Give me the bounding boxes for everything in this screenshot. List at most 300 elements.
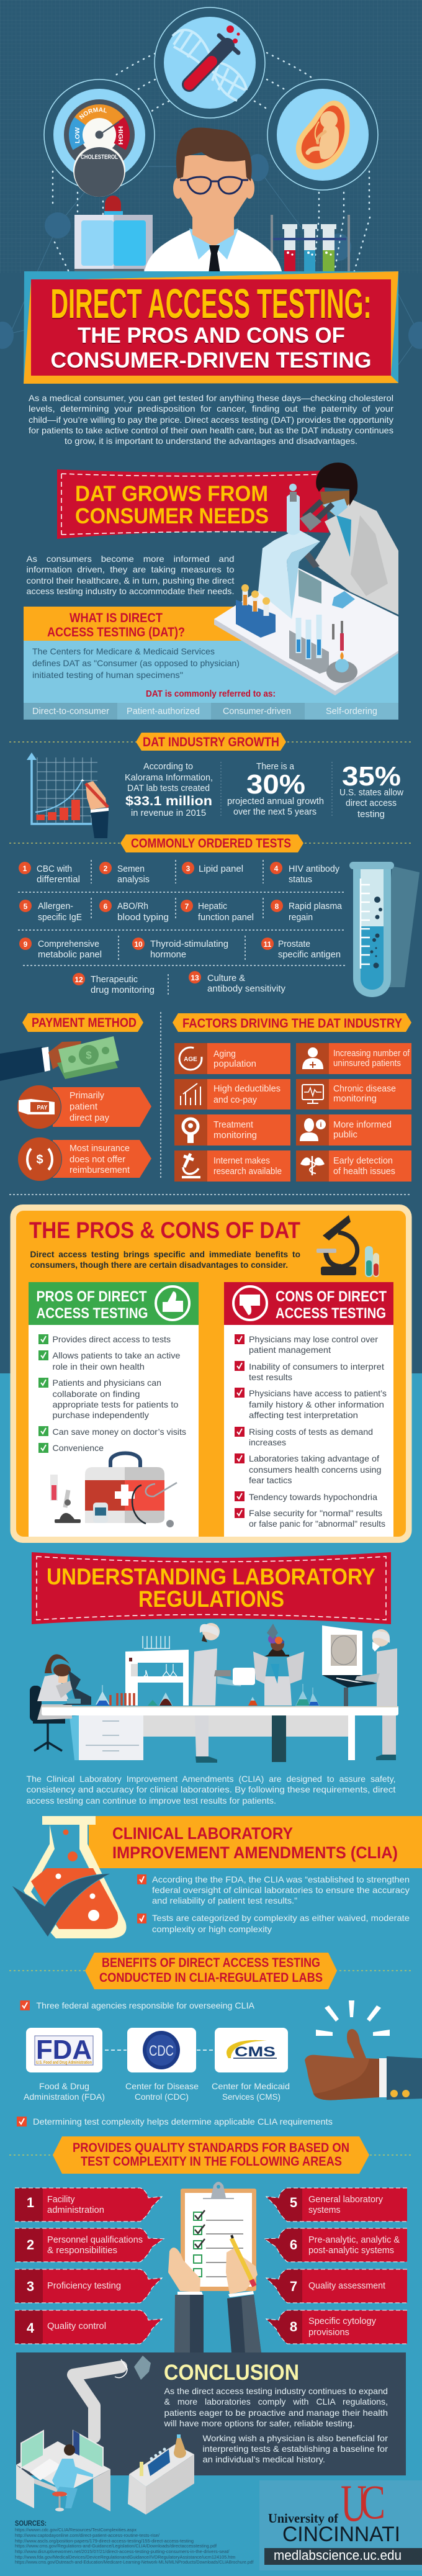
- pros list: Convenience: [52, 1443, 104, 1453]
- synonyms row: Direct-to-consumer: [32, 706, 109, 716]
- heading: CLIA: IMPROVEMENT AMENDMENTS (CLIA): [112, 1843, 398, 1862]
- icon: thumbs down: [233, 1286, 267, 1320]
- chart: rising revenue: [27, 752, 109, 838]
- laboratory shelf with glassware: [125, 1636, 189, 1706]
- area 2: Personnel qualifications: [47, 2235, 143, 2245]
- agency: CMS: [212, 2028, 290, 2102]
- factor: more informed public: i: [320, 1121, 322, 1129]
- icon: cholesterol gauge circle: NORMAL: [79, 107, 107, 119]
- sources: https://www.cms.gov/Outreach-and-Education/Medicare-Learning-Network-MLN/MLNProducts/Downloads/CLIABrochure.pdf: [15, 2559, 254, 2565]
- test 6: blood typing: [117, 912, 169, 923]
- section heading: DAT grows from consumer needs: [57, 469, 329, 539]
- text: conclusion paragraph 1: patients eager to be proactive and manage their health: [164, 2408, 388, 2418]
- area 7: [266, 2269, 407, 2303]
- factor: treatment monitoring: monitoring: [213, 1130, 257, 1141]
- test 1: CBC with: [37, 864, 72, 874]
- factor: uninsured patients: [296, 1043, 411, 1074]
- area 1: 1: [27, 2195, 34, 2210]
- panel: cons: [224, 1282, 393, 1537]
- factor: internet research: [174, 1150, 290, 1182]
- illustration: laboratory scene: [30, 1623, 398, 1763]
- section heading: DAT grows from consumer needs: CONSUMER NEEDS: [75, 504, 269, 528]
- heading: cons: CONS OF DIRECT: [276, 1288, 387, 1305]
- heading: payment method: [22, 1013, 143, 1032]
- test 10: 10: [134, 940, 143, 949]
- cons list: Tendency towards hypochondria: [249, 1492, 377, 1502]
- area 3: [15, 2269, 162, 2303]
- stat: 35%: U.S. states allow: [339, 787, 403, 798]
- paragraph: consumer needs: As consumers become more informed and: [26, 554, 235, 564]
- agency: CDC: Control (CDC): [135, 2092, 189, 2102]
- factor: more informed public: public: [333, 1129, 357, 1140]
- test 12: Therapeutic: [91, 974, 138, 985]
- url bar: medlabscience.uc.edu: [274, 2547, 402, 2563]
- CLIA bullets: According the the FDA, the CLIA was “established to strengthen: [152, 1874, 410, 1884]
- heading: DAT industry growth: DAT INDUSTRY GROWTH: [143, 735, 279, 749]
- bullet: three federal agencies: Three federal agencies responsible for overseeing CLIA: [36, 2000, 255, 2010]
- doctor figure: [144, 127, 282, 274]
- sources: [15, 2519, 254, 2565]
- test 8: regain: [289, 912, 313, 923]
- area 6: 6: [290, 2237, 297, 2253]
- stat: $33.1 million: in revenue in 2015: [131, 808, 206, 818]
- text: conclusion paragraph 1: will have more options for safer, reliable testing.: [163, 2418, 355, 2428]
- figure: seated technician: [52, 2444, 93, 2511]
- icon: cholesterol gauge circle: HIGH: [117, 126, 123, 145]
- test 3: [182, 862, 243, 874]
- factor: uninsured patients: Increasing number of: [333, 1048, 410, 1059]
- payment item: direct pay: patient: [70, 1101, 98, 1112]
- test 4: HIV antibody: [289, 864, 339, 874]
- heading: what is DAT: ACCESS TESTING (DAT)?: [47, 625, 185, 639]
- illustration: scientist at microscope: [214, 463, 398, 695]
- molecule backdrop: [0, 154, 422, 366]
- test 11: specific antigen: [278, 949, 341, 960]
- test 7: function panel: [198, 912, 254, 923]
- test 9: [19, 938, 102, 960]
- definition text: [32, 646, 240, 680]
- heading: DAT industry growth: [9, 733, 411, 751]
- section heading: understanding laboratory regulations: UNDERSTANDING LABORATORY: [47, 1564, 375, 1589]
- test 5: Allergen-: [38, 901, 73, 911]
- figure: scientist raising flasks: [253, 1624, 304, 1762]
- pros list: Provides direct access to tests: [52, 1334, 171, 1344]
- stat: 30%: projected annual growth: [227, 796, 324, 807]
- cons list: affecting test interpretation: [249, 1410, 358, 1420]
- agency: CDC: Center for Disease: [125, 2081, 199, 2091]
- title text: THE PROS AND CONS OF: [78, 323, 345, 348]
- factor: more informed public: [296, 1114, 411, 1146]
- icon: hand with money: [0, 1036, 119, 1081]
- test 2: 2: [104, 864, 108, 873]
- pros list: Patients and physicians can: [52, 1378, 161, 1388]
- test 3: Lipid panel: [199, 864, 243, 874]
- payment item: direct pay: PAY: [37, 1105, 48, 1111]
- area 5: systems: [308, 2205, 340, 2215]
- payment item: no reimbursement: [17, 1137, 151, 1182]
- test 13: Culture &: [207, 973, 245, 983]
- intro paragraph: for patients to take active control of their own health care, but as the DAT industry continues: [29, 425, 393, 435]
- sources: https://wwwn.cdc.gov/CLIA/Resources/TestComplexities.aspx: [15, 2527, 137, 2533]
- stat: 30%: [227, 761, 324, 817]
- text: conclusion paragraph 2: Working wish a physician is also beneficial for: [202, 2433, 388, 2443]
- agency: FDA: U.S. Food and Drug Administration: [36, 2061, 92, 2065]
- heading: pros: ACCESS TESTING: [36, 1305, 148, 1322]
- test 2: [99, 862, 150, 885]
- area 1: Facility: [47, 2194, 75, 2205]
- sources: SOURCES:: [15, 2519, 47, 2528]
- definition text: initiated testing of human specimens": [32, 670, 183, 680]
- icon: cholesterol gauge circle: CHOLESTEROL: [81, 154, 118, 161]
- cons list: False security for "normal" results: [249, 1508, 382, 1518]
- area 4: Quality control: [47, 2321, 106, 2331]
- test 9: Comprehensive: [38, 939, 99, 949]
- area 5: [266, 2188, 407, 2221]
- agency: CMS: Center for Medicaid: [212, 2081, 290, 2091]
- factor: internet research: research available: [213, 1166, 282, 1177]
- agency: FDA: Administration (FDA): [24, 2092, 105, 2102]
- test 8: 8: [275, 902, 279, 911]
- heading: benefits of DAT in CLIA labs: BENEFITS OF DIRECT ACCESS TESTING: [102, 1956, 320, 1970]
- area 8: Specific cytology: [308, 2316, 376, 2326]
- area 2: [15, 2228, 164, 2262]
- intro text: pros and cons: Direct access testing brings specific and immediate benefits to: [30, 1250, 300, 1259]
- cons list: patient management: [249, 1345, 331, 1355]
- pros list: purchase independently: [52, 1410, 149, 1420]
- test 10: hormone: [150, 949, 186, 960]
- cons list: Inability of consumers to interpret: [249, 1362, 384, 1372]
- paragraph: CLIA overview: consistency and accuracy for clinical laboratories. By following these requirements, direct: [26, 1784, 396, 1794]
- factor: early detection: Early detection: [333, 1155, 393, 1166]
- test 12: drug monitoring: [91, 985, 155, 995]
- intro text: pros and cons: [30, 1250, 300, 1270]
- icon: thumbs up: [156, 1286, 189, 1320]
- logo: UC monogram: C: [361, 2475, 385, 2529]
- intro paragraph: to grow, it is important to understand the advantages and disadvantages.: [65, 436, 357, 446]
- test 9: 9: [24, 940, 28, 949]
- icon: cholesterol gauge circle: [43, 79, 155, 197]
- factor: high deductibles: High deductibles: [213, 1083, 281, 1094]
- agency: CMS: Services (CMS): [222, 2092, 281, 2102]
- factor: internet research: Internet makes: [213, 1155, 270, 1166]
- heading: cons: [276, 1288, 387, 1322]
- heading: payment method: PAYMENT METHOD: [32, 1016, 137, 1030]
- area 1: [15, 2188, 162, 2221]
- test 2: Semen: [117, 864, 145, 874]
- intro paragraph: As a medical consumer, you can get tested for anything these days—checking cholesterol: [29, 393, 393, 403]
- agency: CDC: [125, 2028, 199, 2102]
- cons list: test results: [249, 1372, 292, 1382]
- pros list: [38, 1334, 186, 1453]
- workstation: computer desk: [16, 2430, 110, 2511]
- icon: thumbs up hand: [305, 2000, 422, 2100]
- heading: quality standards: [9, 2136, 411, 2174]
- stat: 35%: 35%: [342, 761, 401, 792]
- panel: payment method: [0, 1013, 151, 1182]
- sources: https://www.cms.gov/Regulations-and-Guidance/Legislation/CLIA/Downloads/directaccesstesting.pdf: [15, 2543, 217, 2549]
- factor: chronic disease monitoring: [296, 1079, 411, 1109]
- text: conclusion paragraph 1: [163, 2386, 388, 2428]
- icon: clipboard held by hands: [168, 2182, 261, 2353]
- pros list: appropriate tests for patients to: [52, 1399, 179, 1409]
- factor: aging population: population: [213, 1059, 256, 1069]
- stat: $33.1 million: DAT lab tests created: [127, 783, 210, 793]
- test 13: 13: [191, 974, 199, 982]
- heading: conclusion: CONCLUSION: [164, 2361, 299, 2385]
- title banner: [24, 271, 398, 384]
- payment item: direct pay: Primarily: [70, 1090, 104, 1101]
- test 11: 11: [264, 940, 272, 949]
- factor: high deductibles: and co-pay: [213, 1095, 257, 1105]
- factor: more informed public: More informed: [333, 1119, 392, 1130]
- area 3: 3: [27, 2279, 34, 2294]
- payment item: no reimbursement: reimbursement: [70, 1165, 130, 1175]
- sources: http://www.ascls.org/position-papers/179-direct-access-testing/155-direct-access-testing: [15, 2538, 194, 2544]
- factor: uninsured patients: uninsured patients: [333, 1058, 401, 1069]
- paragraph: CLIA overview: access testing can continue to improve test results for patients.: [26, 1796, 276, 1805]
- area 8: 8: [290, 2319, 297, 2334]
- brand block: University of Cincinnati: CINCINNATI: [282, 2523, 400, 2546]
- CLIA bullets: complexity or high complexity: [152, 1924, 272, 1934]
- paragraph: consumer needs: control their healthcare, & in turn, pushing the direct: [26, 576, 235, 585]
- text: conclusion paragraph 2: [202, 2433, 388, 2464]
- test 12: [73, 973, 155, 995]
- section heading: understanding laboratory regulations: [32, 1552, 391, 1624]
- heading: pros: [36, 1288, 148, 1322]
- bullet: test complexity: Determining test complexity helps determine applicable CLIA requirements: [33, 2117, 333, 2126]
- icon: monitor with siren: [74, 196, 153, 273]
- payment item: direct pay: [17, 1085, 151, 1129]
- agency: FDA: [24, 2028, 105, 2102]
- test 3: 3: [186, 864, 191, 873]
- test 6: 6: [104, 902, 108, 911]
- intro paragraph: [29, 393, 393, 446]
- pros list: role in their own health: [52, 1362, 145, 1372]
- test 5: specific IgE: [38, 912, 82, 923]
- heading: cons: ACCESS TESTING: [276, 1305, 386, 1322]
- icon: hand with money: $: [86, 1049, 92, 1061]
- area 3: Proficiency testing: [47, 2280, 121, 2291]
- area 7: Quality assessment: [308, 2280, 386, 2291]
- area 5: 5: [290, 2195, 297, 2210]
- icon: flask with check: [11, 1816, 126, 1938]
- factor: high deductibles: [174, 1079, 290, 1109]
- test 1: [19, 862, 80, 885]
- area 2: 2: [27, 2237, 34, 2253]
- payment item: no reimbursement: Most insurance: [70, 1143, 130, 1154]
- icon: microscope: [316, 1215, 379, 1277]
- stat: $33.1 million: $33.1 million: [125, 794, 212, 808]
- stat: 35%: testing: [357, 809, 385, 820]
- factor: early detection: of health issues: [333, 1166, 395, 1177]
- cons list: Physicians have access to patient’s: [249, 1388, 387, 1398]
- stat: $33.1 million: Kalorama Information,: [125, 772, 213, 783]
- section: clinical laboratory improvement amendments: [11, 1816, 422, 1938]
- sources: http://www.disruptivewomen.net/2015/07/21/direct-access-testing-putting-consumers-in-the-drivers-seat/: [15, 2549, 230, 2554]
- pros list: collaborate on finding: [52, 1389, 140, 1399]
- sources: http://www.captodayonline.com/direct-patient-access-routine-tests-rise/: [15, 2533, 160, 2538]
- heading: CLIA: CLINICAL LABORATORY: [112, 1824, 293, 1843]
- paragraph: CLIA overview: [26, 1774, 396, 1805]
- agency: CMS: CMS: [235, 2044, 276, 2059]
- cons list: Physicians may lose control over: [249, 1334, 378, 1344]
- heading: commonly ordered tests: COMMONLY ORDERED TESTS: [131, 836, 291, 851]
- icon: hand with pencil: [86, 781, 109, 838]
- figure: scientist with tablet: [192, 1623, 255, 1763]
- section heading: understanding laboratory regulations: REGULATIONS: [138, 1586, 284, 1612]
- dotted connectors between test circles: [53, 53, 370, 273]
- agency: FDA: Food & Drug: [39, 2081, 89, 2091]
- definition text: The Centers for Medicare & Medicaid Services: [32, 646, 215, 656]
- panel: factors driving the DAT industry: [173, 1013, 411, 1182]
- area 1: administration: [47, 2205, 104, 2215]
- test 6: [99, 900, 169, 923]
- synonyms row: Consumer-driven: [223, 706, 291, 716]
- factor: early detection: [296, 1150, 411, 1182]
- brand block: University of Cincinnati: University of: [268, 2511, 339, 2526]
- intro paragraph: child—if you’re willing to pay the price. Direct access testing (DAT) provides the opportunity: [29, 415, 393, 425]
- test 7: [181, 900, 254, 923]
- test 9: metabolic panel: [38, 949, 102, 960]
- panel: pros and cons of DAT: [10, 1204, 412, 1543]
- workstation: sample bench: [128, 2434, 194, 2515]
- figure: seated scientist: [30, 1654, 91, 1760]
- area 4: 4: [27, 2320, 35, 2336]
- heading: quality standards: TEST COMPLEXITY IN THE FOLLOWING AREAS: [81, 2154, 342, 2169]
- cons list: [235, 1334, 387, 1529]
- heading: what is DAT: [47, 611, 185, 639]
- synonyms row: [24, 703, 398, 720]
- intro text: pros and cons: consumers, though there are certain disadvantages to consider.: [30, 1260, 288, 1270]
- test 1: 1: [23, 864, 27, 873]
- title text: CONSUMER-DRIVEN TESTING: [51, 348, 371, 373]
- text: conclusion paragraph 1: & more laboratories comply with CLIA regulations,: [164, 2397, 388, 2407]
- test 5: 5: [24, 902, 28, 911]
- illustration: robotic arm and lab workstations: [16, 2356, 194, 2515]
- area 8: provisions: [308, 2327, 349, 2338]
- list: quality standard areas: [15, 2188, 407, 2344]
- test 2: analysis: [117, 874, 150, 885]
- factor: aging population: [174, 1043, 290, 1074]
- test 8: [271, 900, 343, 923]
- flasks and sample tubes: [96, 1684, 319, 1706]
- test 5: [19, 900, 82, 923]
- CLIA bullets: [137, 1874, 410, 1934]
- heading: what is DAT: WHAT IS DIRECT: [70, 611, 163, 625]
- cons list: Laboratories taking advantage of: [249, 1453, 379, 1463]
- synonyms row: Patient-authorized: [127, 706, 200, 716]
- test 11: [261, 938, 341, 960]
- test 7: 7: [185, 902, 189, 911]
- panel: what is DAT: [24, 607, 398, 720]
- test 1: differential: [37, 874, 80, 885]
- test 4: 4: [274, 864, 279, 873]
- CLIA bullets: and reliability of patient test results.”: [152, 1896, 297, 1905]
- test 4: status: [289, 874, 312, 885]
- payment item: no reimbursement: $: [36, 1153, 43, 1167]
- area 6: Pre-analytic, analytic &: [308, 2235, 400, 2245]
- test 4: [270, 862, 339, 885]
- payment item: no reimbursement: does not offer: [70, 1154, 125, 1165]
- icon: large test tube: [349, 862, 420, 997]
- test 10: [132, 938, 228, 960]
- agency: FDA: FDA: [36, 2035, 92, 2065]
- stat: 30%: 30%: [246, 769, 305, 800]
- heading: pros and cons: THE PROS & CONS OF DAT: [29, 1218, 300, 1243]
- factor: aging population: Aging: [213, 1049, 236, 1059]
- text: conclusion paragraph 1: As the direct access testing industry continues to expand: [164, 2386, 388, 2396]
- area 4: [15, 2310, 162, 2344]
- hero illustration: [43, 7, 379, 271]
- cons list: consumers health concerns using: [249, 1465, 381, 1475]
- logo: UC monogram: U: [341, 2474, 367, 2533]
- cons list: or false panic for "abnormal" results: [249, 1519, 385, 1529]
- stat: 30%: over the next 5 years: [233, 807, 316, 817]
- icon: test tube rack: [272, 215, 349, 273]
- stat: 35%: direct access: [346, 798, 397, 808]
- stat: $33.1 million: [125, 761, 213, 818]
- test 6: ABO/Rh: [117, 901, 148, 911]
- CLIA bullets: federal oversight of clinical laboratories to ensure the accuracy: [152, 1885, 410, 1895]
- CLIA bullets: Tests are categorized by complexity as either waived, moderate: [152, 1913, 410, 1923]
- payment item: direct pay: direct pay: [70, 1113, 109, 1123]
- area 8: [266, 2310, 407, 2344]
- pros list: Allows patients to take an active: [52, 1350, 181, 1360]
- heading: benefits of DAT in CLIA labs: CONDUCTED IN CLIA-REGULATED LABS: [99, 1971, 323, 1985]
- test 10: Thyroid-stimulating: [150, 939, 228, 949]
- test 11: Prostate: [278, 939, 310, 949]
- text: conclusion paragraph 2: interpreting tests & establishing a baseline for: [202, 2444, 388, 2454]
- heading: pros: PROS OF DIRECT: [36, 1288, 147, 1305]
- stat: 35%: [339, 761, 403, 820]
- list: commonly ordered tests: [18, 860, 345, 995]
- cons list: family history & other information: [249, 1399, 384, 1409]
- factor: treatment monitoring: Treatment: [213, 1119, 254, 1130]
- figure: scientist at computer: [322, 1625, 397, 1760]
- factor: chronic disease monitoring: Chronic disease: [333, 1083, 396, 1094]
- heading: CLIA: [112, 1824, 398, 1862]
- title text: [51, 281, 371, 373]
- paragraph: consumer needs: access testing industry to accommodate their needs.: [26, 586, 235, 596]
- heading: commonly ordered tests: [9, 834, 411, 852]
- area 7: 7: [290, 2279, 297, 2294]
- panel: pros: [29, 1282, 199, 1537]
- sources: http://www.fda.gov/MedicalDevices/DeviceRegulationandGuidance/IVDRegulatoryAssistance/ucm124105.htm: [15, 2554, 236, 2560]
- definition text: defines DAT as "Consumer (as opposed to physician): [32, 658, 240, 668]
- test 8: Rapid plasma: [289, 901, 343, 911]
- cons list: fear tactics: [249, 1475, 292, 1485]
- test 12: 12: [74, 975, 83, 984]
- icon: medical kit: [50, 1453, 177, 1527]
- agency: CDC: CDC: [149, 2043, 174, 2059]
- test 13: [189, 971, 285, 994]
- section heading: DAT grows from consumer needs: DAT GROWS FROM: [75, 482, 268, 506]
- paragraph: consumer needs: information driven, they are taking measures to: [26, 564, 235, 574]
- intro paragraph: levels, determining your predisposition for cancer, finding out the paternity of your: [29, 404, 393, 414]
- heading: quality standards: PROVIDES QUALITY STANDARDS FOR BASED ON: [73, 2141, 349, 2155]
- cons list: Rising costs of tests as demand: [249, 1427, 373, 1437]
- text: conclusion paragraph 2: an individual’s medical history.: [202, 2454, 325, 2464]
- panel: conclusion: [16, 2352, 406, 2475]
- brand block: University of Cincinnati: [259, 2474, 422, 2570]
- paragraph: CLIA overview: The Clinical Laboratory Improvement Amendments (CLIA) are designed to assure safety,: [26, 1774, 395, 1784]
- area 2: & responsibilities: [47, 2245, 117, 2256]
- pros list: Can save money on doctor’s visits: [52, 1427, 186, 1437]
- area 6: post-analytic systems: [308, 2245, 394, 2256]
- test 13: antibody sensitivity: [207, 983, 285, 994]
- test 7: Hepatic: [198, 901, 227, 911]
- factor: treatment monitoring: [174, 1114, 290, 1146]
